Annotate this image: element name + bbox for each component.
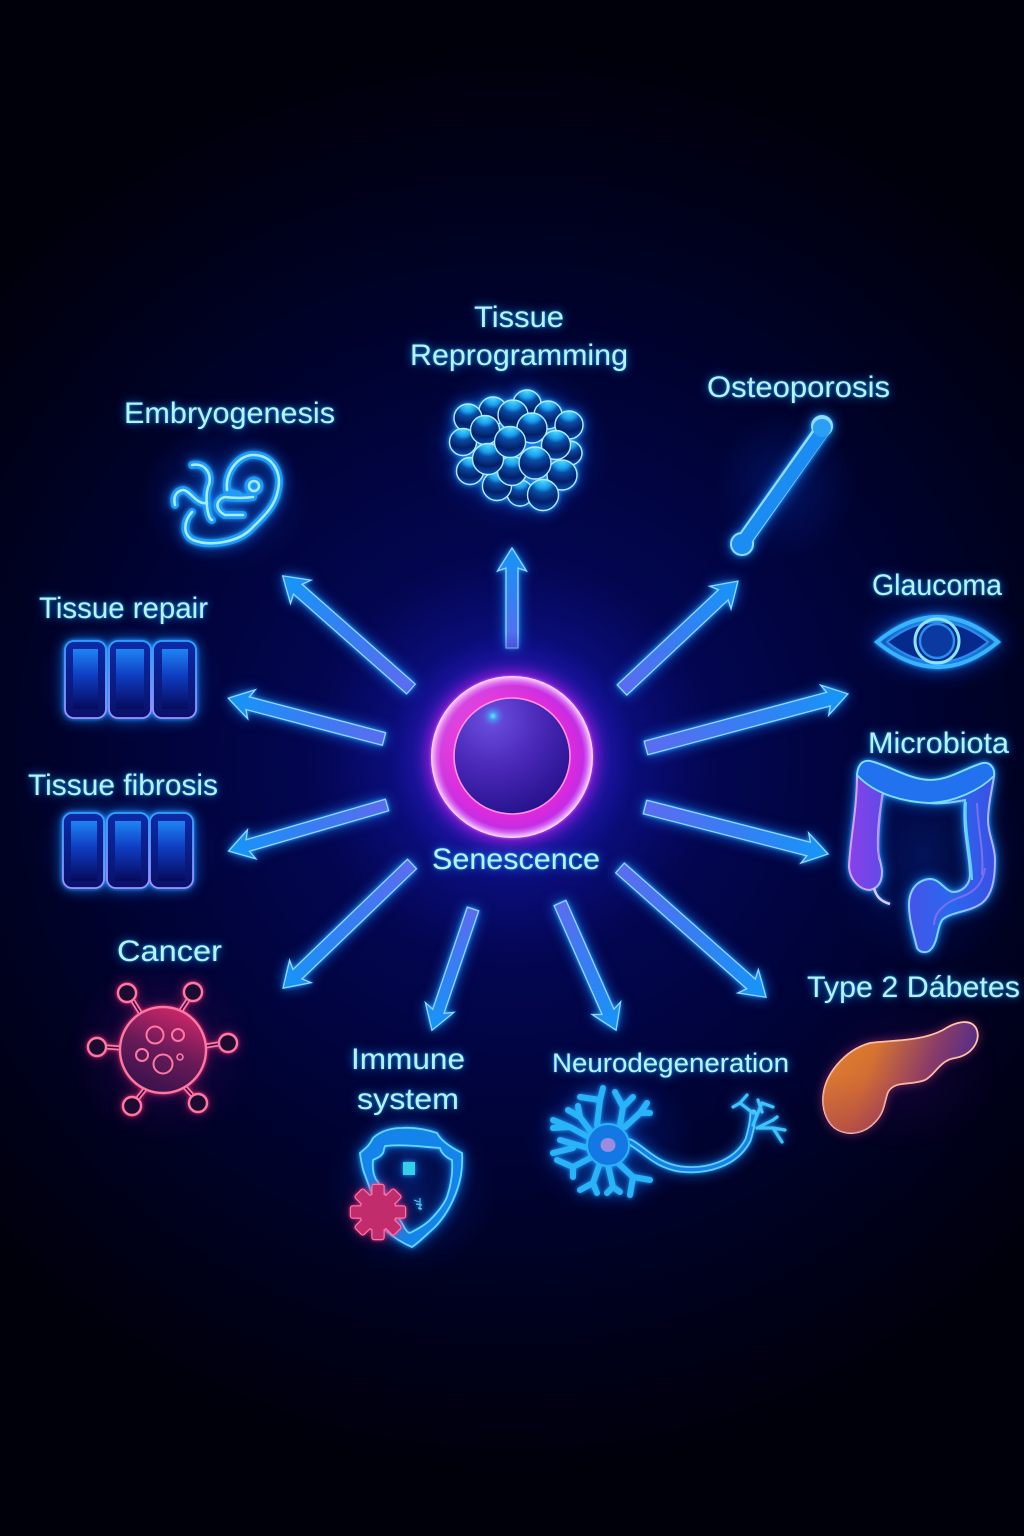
arrow to Type 2 Diabetes bbox=[610, 856, 776, 1009]
label: Tissue Reprogramming: Tissue bbox=[474, 301, 564, 334]
node: Cancer bbox=[68, 935, 258, 1145]
neuron nucleus bbox=[600, 1138, 616, 1152]
arrow to Tissue Reprogramming bbox=[498, 548, 526, 648]
node: Tissue fibrosis bbox=[28, 769, 223, 910]
node: Type 2 Diabetes bbox=[800, 971, 1020, 1150]
node: Glaucoma bbox=[853, 569, 1023, 690]
icon: shield bbox=[360, 1128, 462, 1247]
arrow to Embryogenesis bbox=[272, 564, 421, 701]
label: Senescence: Senescence bbox=[432, 843, 600, 876]
nucleus highlight bbox=[481, 704, 505, 728]
label: Tissue fibrosis: Tissue fibrosis bbox=[28, 769, 218, 802]
arrows radiating from the cell bbox=[224, 548, 852, 1036]
icon: eye bbox=[877, 617, 998, 667]
arrow to Neurodegeneration bbox=[546, 897, 630, 1036]
node: Microbiota bbox=[825, 727, 1024, 970]
membrane rim bbox=[432, 678, 592, 836]
arrow to Microbiota bbox=[641, 792, 832, 869]
label: Immune system: Immune bbox=[351, 1043, 465, 1076]
icon: tissue fibrosis cells bbox=[63, 813, 193, 888]
icon: neuron bbox=[553, 1088, 785, 1195]
arrow to Osteoporosis bbox=[611, 570, 749, 701]
node: Immune system bbox=[325, 1043, 495, 1275]
icon: cancer cell bbox=[88, 983, 237, 1115]
icon: cell cluster bbox=[450, 390, 583, 510]
arrow to Glaucoma bbox=[642, 679, 852, 763]
icon: bone bbox=[730, 415, 833, 556]
label: Neurodegeneration: Neurodegeneration bbox=[552, 1048, 789, 1078]
label: Type 2 Dábetes: Type 2 Dábetes bbox=[807, 971, 1020, 1004]
label: Cancer: Cancer bbox=[117, 935, 222, 968]
label: Tissue Reprogramming: Reprogramming bbox=[410, 339, 628, 372]
label: Tissue repair: Tissue repair bbox=[39, 592, 208, 625]
label: Microbiota: Microbiota bbox=[868, 727, 1009, 760]
cell outer membrane bbox=[431, 676, 593, 838]
icon: colon bbox=[849, 761, 995, 952]
central cell: Senescence bbox=[387, 632, 637, 882]
cell nucleus bbox=[454, 698, 570, 814]
node: Embryogenesis bbox=[124, 397, 335, 572]
membrane highlight bbox=[432, 677, 592, 837]
label: Osteoporosis: Osteoporosis bbox=[707, 371, 890, 404]
arrow to Tissue repair bbox=[224, 684, 388, 754]
node: Neurodegeneration bbox=[525, 1048, 789, 1215]
arrow to Immune system bbox=[418, 904, 487, 1035]
icon: embryo bbox=[174, 455, 279, 543]
label: Embryogenesis: Embryogenesis bbox=[124, 397, 335, 430]
label: Immune system: system bbox=[357, 1083, 459, 1116]
icon: pancreas bbox=[823, 1022, 978, 1133]
node: Tissue repair bbox=[35, 592, 225, 740]
arrow to Tissue fibrosis bbox=[224, 791, 391, 865]
icon: tissue repair cells bbox=[65, 641, 196, 718]
label: Glaucoma: Glaucoma bbox=[872, 569, 1002, 602]
node: Osteoporosis bbox=[707, 371, 890, 560]
arrow to Cancer bbox=[272, 853, 423, 999]
node: Tissue Reprogramming bbox=[410, 301, 628, 532]
icon: pathogen gear bbox=[351, 1185, 405, 1239]
